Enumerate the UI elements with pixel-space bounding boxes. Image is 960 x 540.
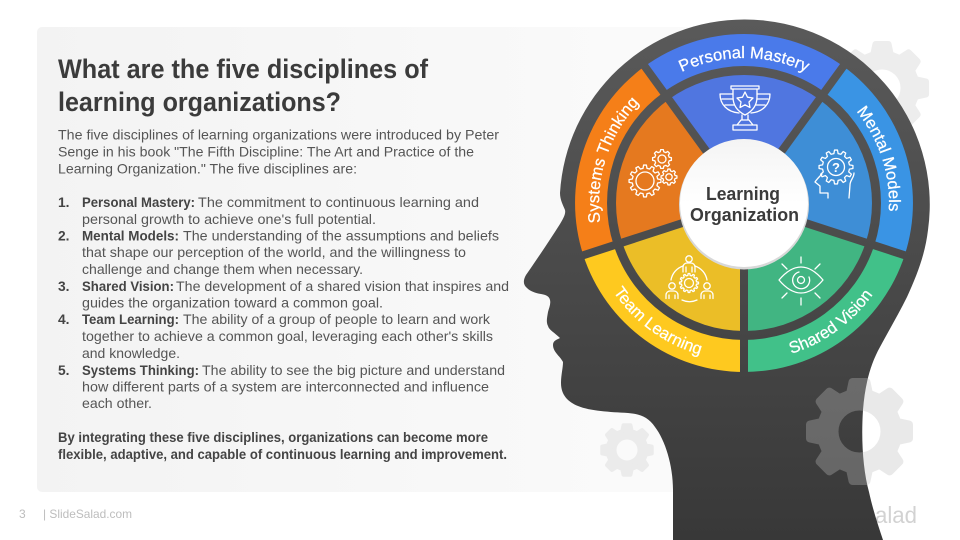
icon: head with gear and question mark: ? [832,160,840,175]
item 1: personal mastery: personal growth to achieve one's full potential. [82,212,376,227]
intro paragraph: Senge in his book "The Fifth Discipline: The Art and Practice of the [58,144,474,160]
segment: mental models [744,66,913,255]
center hub [679,139,809,270]
item 4: team learning: 4. [58,312,70,327]
footer: | SlideSalad.com [43,507,132,521]
icon: eye [779,257,823,305]
closing statement: flexible, adaptive, and capable of continuous learning and improvement. [58,447,507,462]
watermark logo text: alad [875,502,917,528]
item 5: systems thinking [58,363,505,411]
label: shared vision: Shared Vision [789,290,872,353]
label: personal mastery: Personal Mastery [678,46,810,73]
footer: 3 [19,507,26,521]
item 1: personal mastery: 1. [58,195,70,210]
item 2: mental models: 2. [58,228,70,244]
title [58,54,429,117]
item 3: shared vision: guides the organization toward a common goal. [82,296,383,310]
icon: head with gear and question mark [815,150,854,198]
item 5: systems thinking: Systems Thinking: [82,363,199,378]
item 5: systems thinking: 5. [58,363,70,378]
item 4: team learning: The ability of a group of people to learn and work [183,312,490,327]
item 1: personal mastery [58,195,479,227]
icon: trophy [720,86,770,130]
closing statement: By integrating these five disciplines, organizations can become more [58,430,488,445]
label: mental models: Mental Models [857,105,902,211]
numbered list of five disciplines [58,195,509,411]
closing statement [58,430,507,462]
item 4: team learning: together to achieve a common goal, leveraging each other's skills [82,329,493,344]
intro paragraph: The five disciplines of learning organizations were introduced by Peter [58,128,499,142]
item 3: shared vision: 3. [58,279,70,294]
item 2: mental models [58,228,499,277]
head silhouette [524,19,930,540]
decorative gear: bottom left [602,425,652,475]
item 2: mental models: Mental Models: [82,228,179,244]
segment: shared vision [744,203,905,372]
intro paragraph: Learning Organization." The five disciplines are: [58,162,357,176]
title: What are the five disciplines of [58,54,429,84]
item 4: team learning [58,312,493,361]
item 2: mental models: that shape our perception of the world, and the willingness to [82,245,466,260]
icon: three gears [629,150,677,197]
intro paragraph [58,128,499,176]
center hub: Organization [690,204,799,225]
segment: team learning [583,203,744,372]
segment: systems thinking [575,66,744,255]
item 3: shared vision [58,279,509,310]
item 2: mental models: challenge and change them when necessary. [82,262,363,277]
decorative gear: top right [838,44,926,132]
wheel diagram [575,34,913,372]
title: learning organizations? [58,87,341,117]
item 1: personal mastery: The commitment to continuous learning and [198,195,479,210]
label: team learning: Team Learning [616,285,702,357]
item 5: systems thinking: The ability to see the big picture and understand [202,363,505,378]
item 3: shared vision: The development of a shared vision that inspires and [176,279,509,294]
item 3: shared vision: Shared Vision: [82,279,174,294]
item 4: team learning: Team Learning: [82,312,179,327]
decorative gear: on neck [810,382,909,481]
item 5: systems thinking: how different parts of a system are interconnected and influence [82,380,489,394]
item 5: systems thinking: each other. [82,396,152,411]
segment: personal mastery [645,34,843,203]
item 4: team learning: and knowledge. [82,346,180,361]
segment separators [580,64,908,375]
item 1: personal mastery: Personal Mastery: [82,195,195,210]
item 2: mental models: The understanding of the assumptions and beliefs [183,228,499,244]
center hub: Learning [706,183,780,204]
background panel [37,27,717,492]
icon: team around a gear [666,256,713,302]
label: systems thinking: Systems Thinking [588,98,640,222]
